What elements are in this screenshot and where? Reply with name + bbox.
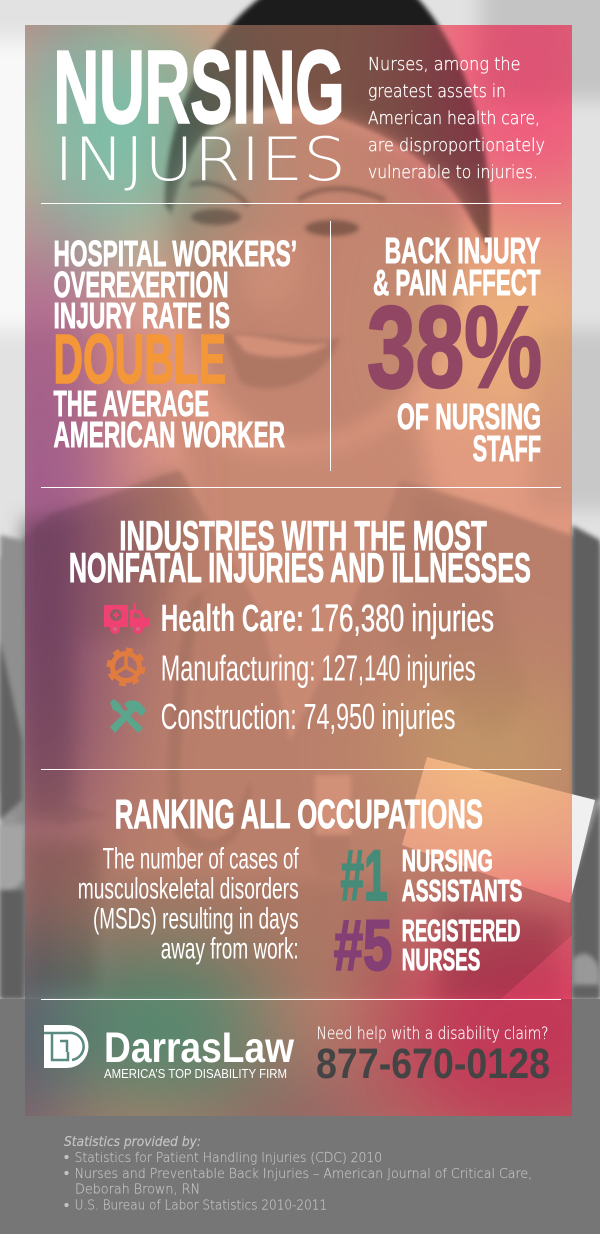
sources: Nurses and Preventable Back Injuries – American Journal of Critical Care, bbox=[75, 1167, 532, 1182]
stat: overexertion injury rate: OVEREXERTION bbox=[54, 264, 228, 305]
icon: ambulance bbox=[104, 603, 149, 634]
sources: Deborah Brown, RN bbox=[75, 1183, 200, 1198]
text: health care: Health Care: bbox=[161, 598, 304, 640]
stat: overexertion injury rate bbox=[54, 233, 297, 455]
text: msd description: (MSDs) resulting in days bbox=[93, 902, 298, 936]
text: msd description: The number of cases of bbox=[103, 842, 299, 876]
title word: injuries: INJURIES bbox=[54, 125, 346, 195]
sources: U.S. Bureau of Labor Statistics 2010-2011 bbox=[75, 1199, 327, 1214]
intro paragraph: are disproportionately bbox=[368, 136, 545, 156]
rank: number five: REGISTERED bbox=[402, 913, 520, 948]
stat: overexertion injury rate: INJURY RATE IS bbox=[54, 295, 230, 336]
stat: overexertion injury rate: AMERICAN WORKER bbox=[54, 414, 285, 455]
text: msd description bbox=[78, 842, 299, 966]
logo: darras law wordmark: DarrasLaw bbox=[104, 1024, 294, 1072]
call to action: Need help with a disability claim? bbox=[316, 1024, 548, 1044]
text: health care: 176,380 injuries bbox=[310, 598, 494, 640]
icon: gear bbox=[109, 650, 143, 684]
intro paragraph: greatest assets in bbox=[368, 82, 506, 102]
title word: nursing: NURSING bbox=[54, 30, 344, 144]
stat: back injury 38 percent bbox=[367, 230, 542, 469]
stat: overexertion injury rate: THE AVERAGE bbox=[54, 383, 209, 424]
intro paragraph bbox=[368, 55, 545, 183]
text: health care bbox=[161, 598, 494, 640]
icon: hammer and screwdriver bbox=[110, 699, 146, 733]
rank: number one: #1 bbox=[341, 837, 388, 916]
rank: number one: ASSISTANTS bbox=[402, 873, 522, 908]
text: manufacturing: 127,140 injuries bbox=[322, 648, 476, 688]
text: msd description: away from work: bbox=[161, 932, 299, 966]
text: construction: Construction: bbox=[161, 696, 297, 737]
tagline: AMERICA’S TOP DISABILITY FIRM bbox=[104, 1067, 287, 1081]
intro paragraph: Nurses, among the bbox=[368, 55, 520, 75]
big number: 38%: 38% bbox=[367, 282, 542, 412]
sources bbox=[64, 1135, 532, 1214]
title bbox=[54, 30, 346, 195]
call to action bbox=[316, 1024, 550, 1088]
rank: number five: NURSES bbox=[402, 942, 480, 977]
rank: number one: NURSING bbox=[402, 843, 493, 878]
sources: Statistics provided by: bbox=[64, 1135, 201, 1150]
text: construction: 74,950 injuries bbox=[304, 696, 456, 737]
sources: Statistics for Patient Handling Injuries (CDC) 2010 bbox=[75, 1151, 382, 1166]
rank: number five bbox=[334, 907, 520, 986]
stat: back injury 38 percent: STAFF bbox=[473, 428, 541, 469]
text: msd description: musculoskeletal disorders bbox=[78, 872, 299, 906]
stat: overexertion injury rate: HOSPITAL WORKERS’ bbox=[54, 233, 297, 274]
heading: industries bbox=[69, 512, 531, 591]
logo: darras law mark bbox=[44, 1025, 88, 1068]
intro paragraph: vulnerable to injuries. bbox=[368, 163, 538, 183]
intro paragraph: American health care, bbox=[368, 109, 540, 129]
rank: number one bbox=[341, 837, 522, 916]
highlight word: double: DOUBLE bbox=[54, 320, 226, 398]
rank: number five: #5 bbox=[334, 907, 392, 986]
text: manufacturing: Manufacturing: bbox=[161, 648, 316, 688]
phone number: 877-670-0128 bbox=[316, 1040, 550, 1088]
